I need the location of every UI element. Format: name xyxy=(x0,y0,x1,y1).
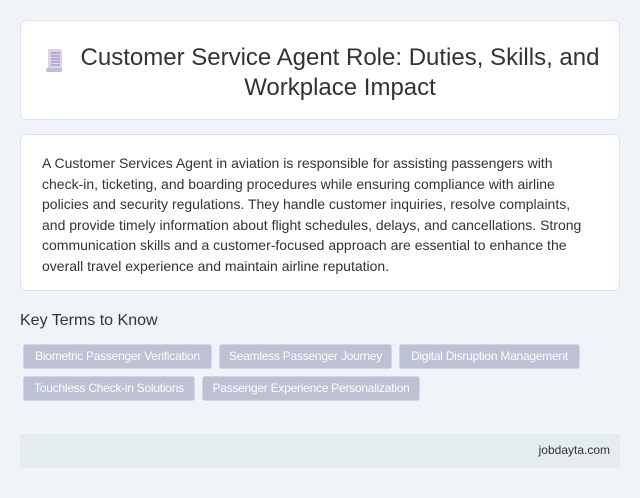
title: Customer Service Agent Role: Duties, Skills, and Workplace Impact xyxy=(81,44,599,101)
tag 1: Biometric Passenger Verification xyxy=(35,349,200,363)
tag 5: Passenger Experience Personalization xyxy=(212,381,410,395)
tag 2: Seamless Passenger Journey xyxy=(229,349,382,363)
description text: A Customer Services Agent in aviation is responsible for assisting passengers with check-in, ticketing, and boarding procedures while ensuring compliance with airline policies and security regulations. They handle customer inquiries, resolve complaints, and provide timely information about flight schedules, delays, and cancellations. Strong communication skills and a customer-focused approach are essential to enhance the overall travel experience and maintain airline reputation. xyxy=(42,155,581,274)
tag 3 xyxy=(399,344,580,369)
heading: key terms: Key Terms to Know xyxy=(20,312,158,329)
tag 4: Touchless Check-in Solutions xyxy=(34,381,184,395)
title card xyxy=(20,20,620,120)
footer xyxy=(20,434,620,468)
footer source text: jobdayta.com xyxy=(539,443,610,457)
tag 1 xyxy=(23,344,212,369)
icon: document xyxy=(46,49,62,72)
tag 2 xyxy=(219,344,392,369)
tag 4 xyxy=(23,376,195,401)
description card xyxy=(20,134,620,291)
tag 3: Digital Disruption Management xyxy=(411,349,568,363)
tag 5 xyxy=(202,376,420,401)
